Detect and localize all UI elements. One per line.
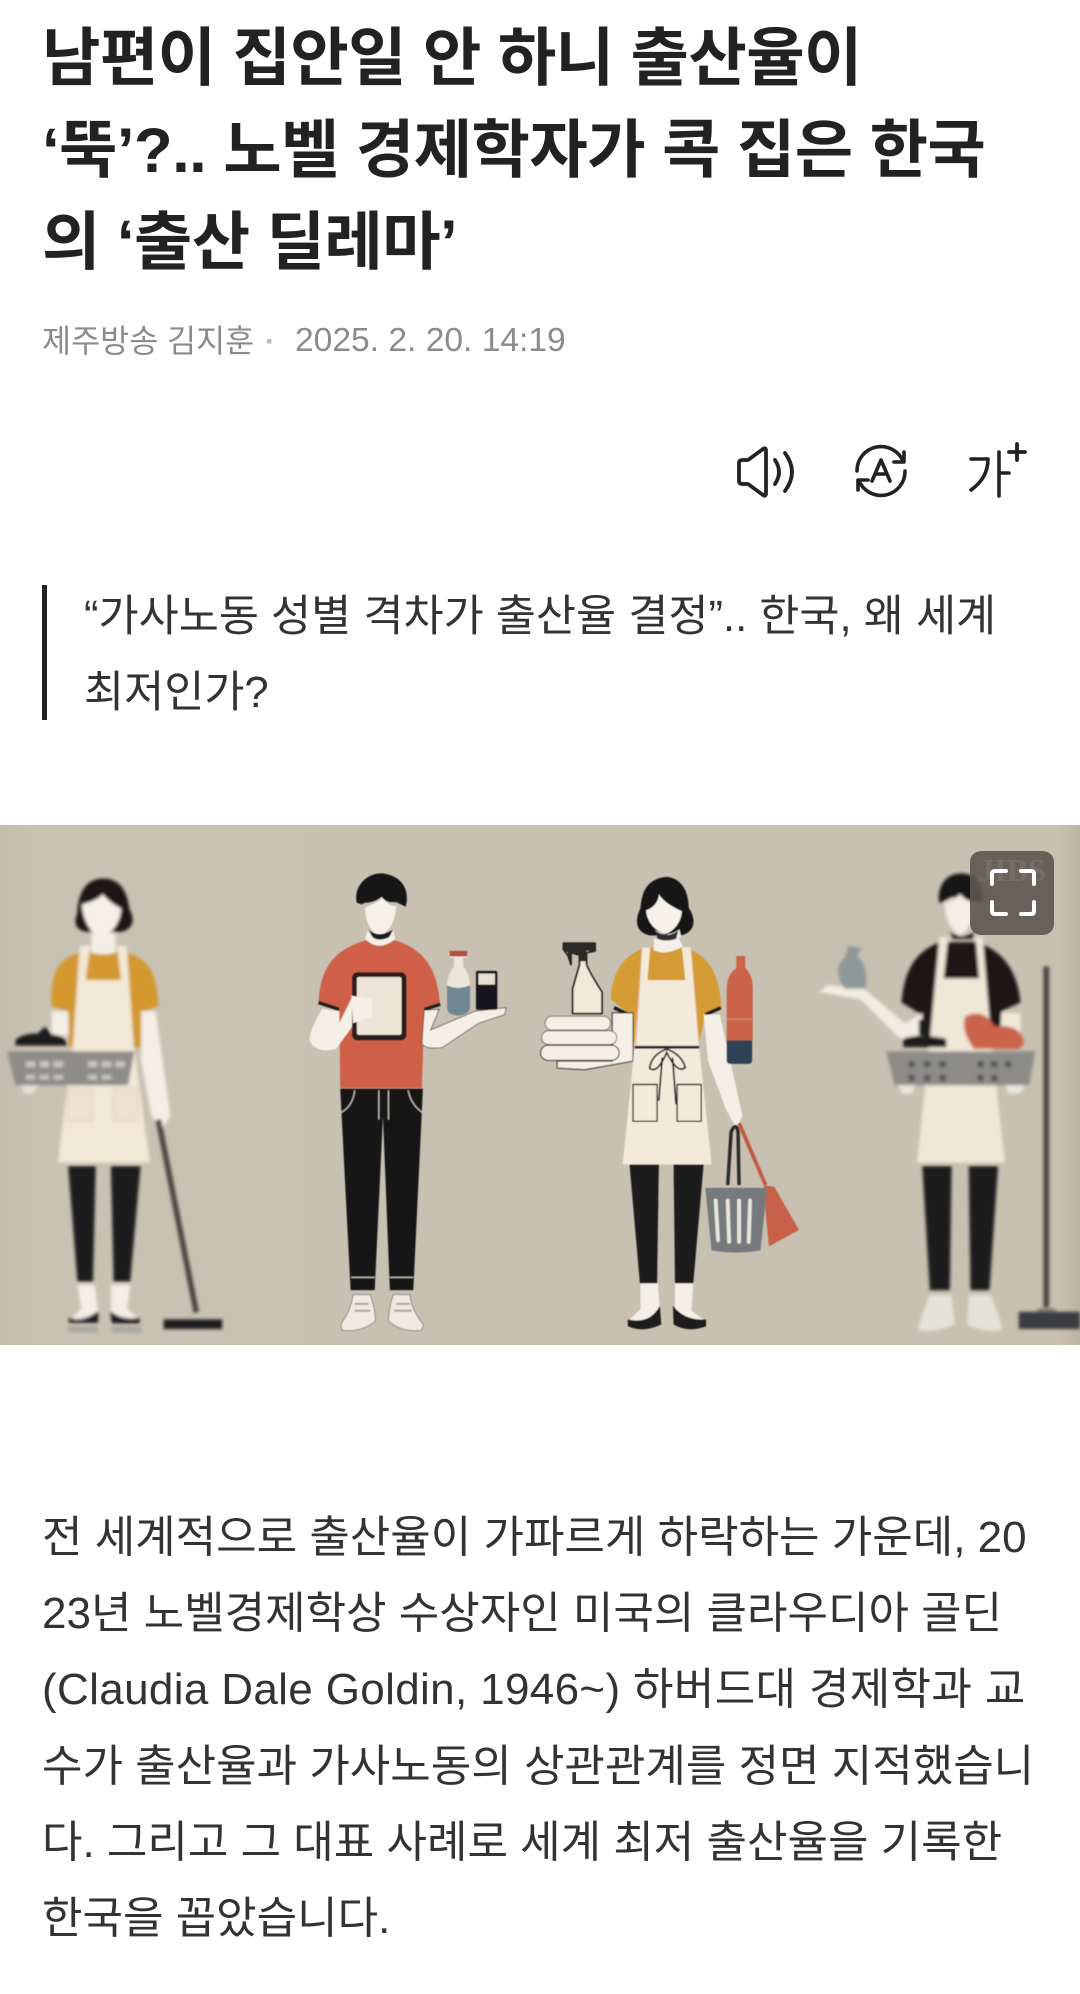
quote block: 최저인가? bbox=[84, 669, 269, 717]
image background bbox=[0, 825, 1080, 1345]
quote block: “가사노동 성별 격차가 출산율 결정”.. 한국, 왜 세계 bbox=[84, 593, 996, 641]
figure: woman with towels, spray bottle and bucket bbox=[541, 877, 799, 1329]
byline: author and date: ▪ bbox=[266, 331, 272, 351]
article body text: 한국을 꼽았습니다. bbox=[42, 1894, 390, 1943]
illustration: four people doing housework bbox=[0, 825, 1080, 1345]
article body text: (Claudia Dale Goldin, 1946~) 하버드대 경제학과 교 bbox=[42, 1665, 1026, 1714]
figure: man with basket, heart and broom bbox=[819, 873, 1080, 1331]
article body text: 수가 출산율과 가사노동의 상관관계를 정면 지적했습니 bbox=[42, 1742, 1034, 1791]
title: ‘뚝’?.. 노벨 경제학자가 콕 집은 한국 bbox=[42, 116, 985, 186]
icon: speaker bbox=[737, 446, 794, 498]
title bbox=[42, 24, 985, 278]
byline: author and date: 제주방송 김지훈 bbox=[42, 323, 254, 359]
watermark: JIBS: JIBS bbox=[978, 852, 1046, 888]
title: 남편이 집안일 안 하니 출산율이 bbox=[42, 24, 862, 94]
quote bar bbox=[42, 585, 47, 720]
icon: text size bbox=[969, 442, 1027, 498]
quote block bbox=[42, 585, 996, 720]
article body text: 전 세계적으로 출산율이 가파르게 하락하는 가운데, 20 bbox=[42, 1513, 1027, 1562]
icon: auto translate A bbox=[855, 444, 907, 498]
title: 의 ‘출산 딜레마’ bbox=[42, 208, 457, 278]
figure: woman with basket and mop bbox=[7, 879, 222, 1332]
icon: fullscreen corners bbox=[992, 871, 1034, 914]
article body text bbox=[42, 1513, 1034, 1943]
byline: author and date: 2025. 2. 20. 14:19 bbox=[295, 322, 566, 359]
article body text: 23년 노벨경제학상 수상자인 미국의 클라우디아 골딘 bbox=[42, 1589, 1002, 1638]
byline: author and date bbox=[42, 322, 566, 359]
article body text: 다. 그리고 그 대표 사례로 세계 최저 출산율을 기록한 bbox=[42, 1818, 1002, 1867]
expand button bbox=[970, 851, 1054, 935]
figure: man with tablet and bottles bbox=[309, 873, 506, 1331]
